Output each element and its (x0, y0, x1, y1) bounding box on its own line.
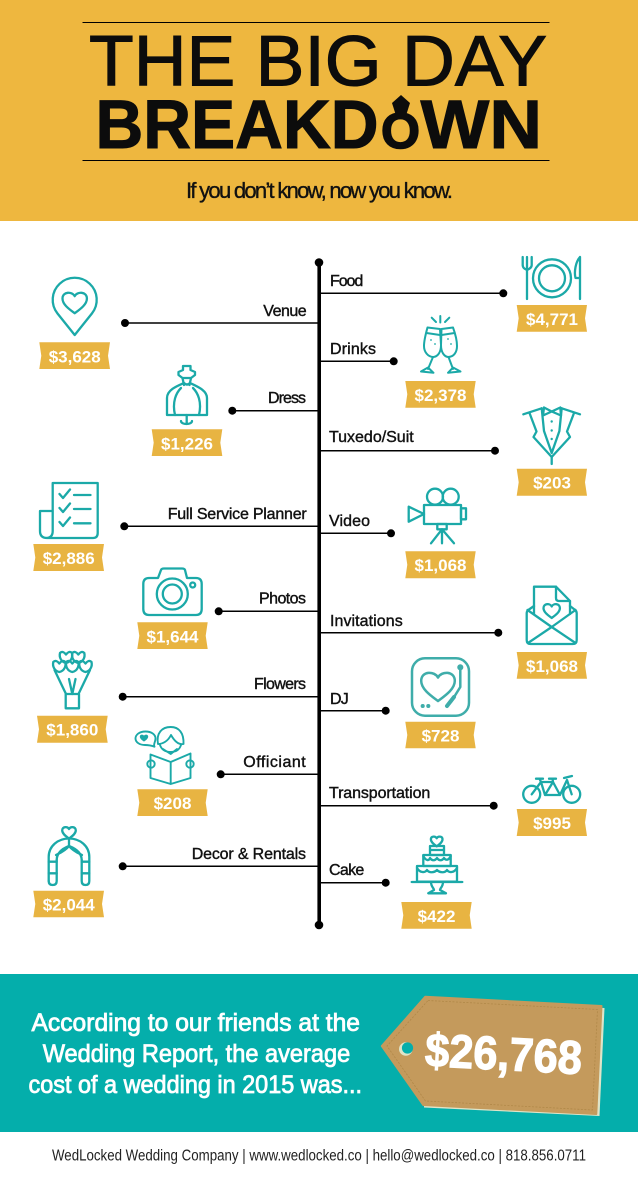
total amount: $26,768 (424, 1023, 583, 1084)
icon: champagne flutes (421, 316, 460, 373)
icon: envelope with heart letter (527, 587, 577, 644)
label: Photos (259, 590, 306, 607)
label: Full Service Planner (168, 506, 307, 523)
connector (119, 693, 319, 701)
item: Drinks (319, 316, 476, 408)
price ribbon: $203 (533, 474, 571, 492)
panel: average cost banner (0, 974, 638, 1132)
item: Photos (137, 568, 319, 649)
timeline spine (315, 258, 323, 929)
connector (319, 629, 502, 637)
icon: tuxedo (523, 408, 580, 464)
item: Invitations (319, 587, 587, 679)
icon: map pin with heart (53, 278, 97, 335)
price tag (382, 997, 604, 1116)
title: Breakdown with ring (96, 86, 542, 163)
icon: officiant reading book (136, 727, 194, 784)
connector (319, 447, 499, 455)
price ribbon: $1,860 (46, 720, 98, 740)
price ribbon (33, 544, 104, 571)
item: DJ (319, 658, 476, 748)
icon: video camera (409, 489, 466, 543)
price ribbon (152, 429, 222, 456)
item: Food (319, 257, 587, 332)
connector (228, 407, 319, 415)
intro text: According to our friends at the (32, 1009, 360, 1037)
icon: plate, fork and knife (523, 257, 580, 299)
price ribbon: $2,378 (414, 386, 466, 405)
price ribbon (517, 305, 587, 332)
price ribbon (517, 652, 587, 679)
label: Video (329, 513, 370, 530)
item: Full Service Planner (33, 483, 319, 571)
price ribbon (137, 622, 208, 649)
price ribbon (517, 809, 587, 836)
price ribbon (33, 891, 104, 917)
price ribbon: $995 (533, 814, 571, 833)
label: Officiant (243, 754, 306, 771)
intro text (28, 1009, 362, 1099)
price ribbon: $2,044 (43, 896, 95, 914)
label: Transportation (329, 785, 430, 802)
subtitle: If you don’t know, now you know. (186, 178, 453, 203)
icon: camera (143, 568, 202, 615)
icon: wedding cake (412, 837, 462, 893)
label: Venue (263, 303, 307, 320)
label: Flowers (254, 676, 306, 693)
title: Breakdown with ring: WN (420, 86, 542, 163)
label: Decor & Rentals (192, 846, 306, 863)
connector (319, 289, 507, 297)
connector (215, 607, 319, 615)
item: Transportation (319, 776, 587, 836)
icon: turntable (412, 658, 469, 716)
item: Venue (39, 278, 319, 369)
label: Dress (268, 390, 306, 407)
connector (119, 862, 319, 870)
label: Tuxedo/Suit (329, 429, 414, 446)
label: DJ (330, 691, 349, 708)
connector (319, 802, 498, 810)
title: Breakdown with ring: BREAKD (96, 86, 378, 163)
icon: bouquet (53, 652, 92, 708)
item: Tuxedo/Suit (319, 408, 587, 496)
price ribbon: $208 (154, 794, 191, 813)
item: Dress (152, 366, 319, 456)
price ribbon: $1,068 (526, 657, 578, 676)
panel: header (0, 0, 638, 221)
price ribbon (39, 342, 110, 369)
price ribbon: $3,628 (49, 348, 101, 366)
icon: wedding dress (167, 366, 207, 424)
item: Decor & Rentals (33, 827, 319, 917)
label: Food (330, 273, 363, 290)
price ribbon (405, 722, 476, 748)
intro text: Wedding Report, the average (43, 1040, 350, 1068)
price ribbon: $1,226 (161, 434, 213, 454)
price ribbon: $1,644 (146, 628, 199, 646)
item: Flowers (37, 652, 319, 743)
label: Cake (329, 862, 364, 879)
price ribbon: $2,886 (43, 549, 95, 568)
item: Video (319, 489, 476, 578)
price ribbon: $4,771 (526, 310, 578, 329)
connector (319, 357, 398, 365)
intro text: cost of a wedding in 2015 was... (28, 1071, 362, 1099)
price ribbon (401, 902, 472, 929)
icon: checklist (40, 483, 98, 538)
item: Cake (319, 837, 472, 929)
connector (319, 529, 395, 537)
price ribbon (405, 381, 476, 408)
price ribbon (37, 716, 108, 743)
label: Drinks (330, 341, 376, 358)
title: Breakdown with ring: O (381, 103, 420, 159)
label: Invitations (330, 613, 403, 630)
connector (121, 319, 319, 327)
price ribbon (405, 551, 476, 578)
icon: tandem bicycle (523, 776, 580, 803)
price ribbon (137, 789, 208, 816)
price ribbon: $1,068 (414, 556, 466, 575)
title: The Big Day: THE BIG DAY (89, 22, 547, 102)
item: Officiant (136, 727, 319, 816)
connector (319, 707, 390, 715)
connector (217, 770, 319, 778)
price ribbon: $422 (418, 907, 455, 926)
price ribbon: $728 (422, 726, 459, 746)
connector (120, 522, 319, 530)
connector (319, 879, 390, 887)
icon: wedding arch (49, 827, 89, 885)
price ribbon (517, 469, 587, 496)
